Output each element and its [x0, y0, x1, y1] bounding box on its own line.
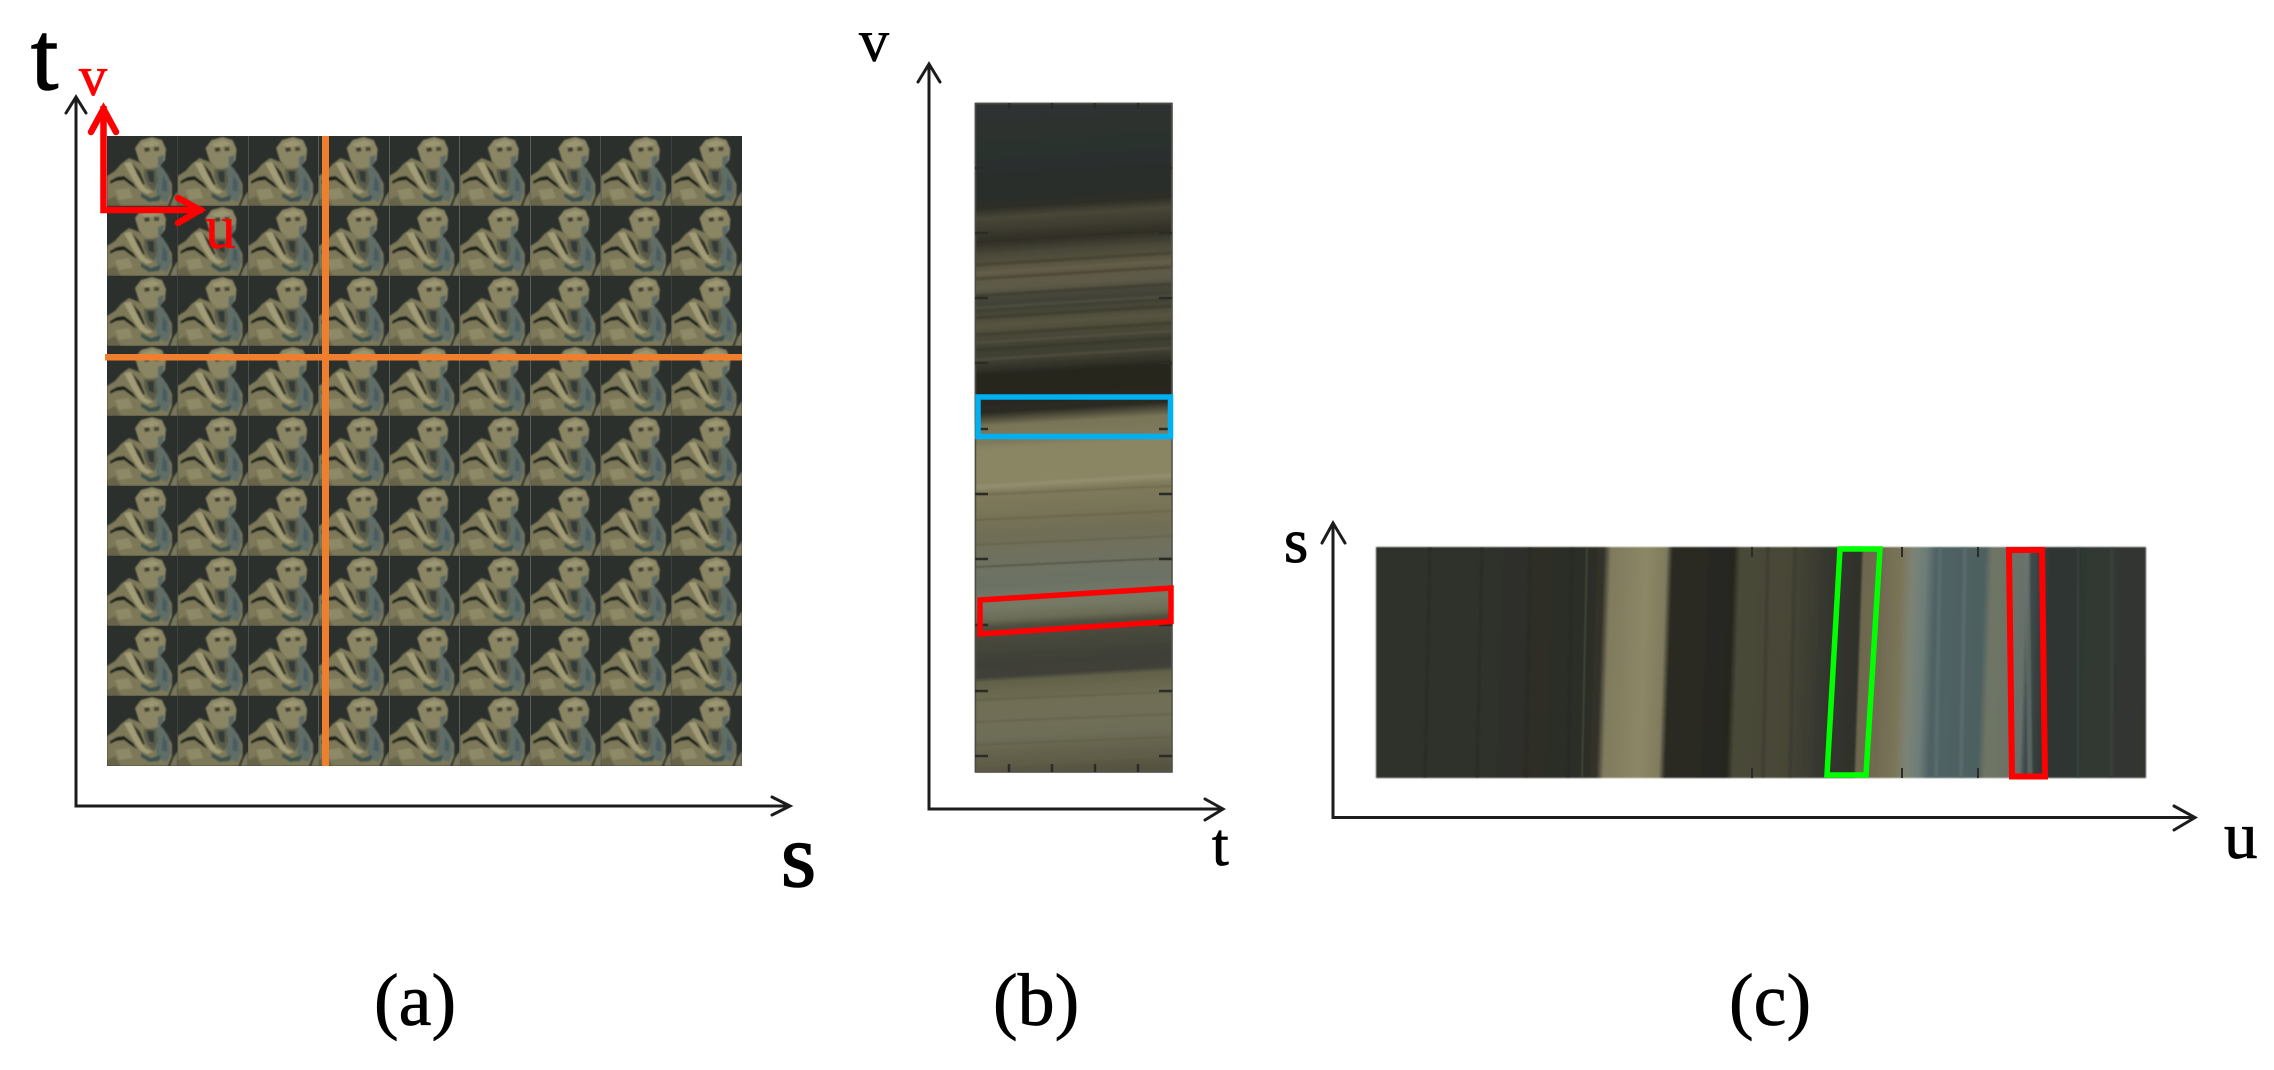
epipolar strip image: [1376, 547, 2146, 778]
label: red v: v: [79, 46, 107, 108]
label: s axis: s: [1284, 508, 1308, 576]
axes: t and v: [918, 64, 1223, 820]
caption: (a): (a): [374, 960, 456, 1042]
label: v axis: v: [859, 8, 889, 74]
red slanted highlight box: [980, 588, 1171, 634]
axes: u and s: [1322, 523, 2195, 830]
panel: (a) light field sub-aperture grid: [31, 3, 816, 906]
cyan highlight box: [978, 397, 1170, 436]
axes: s and t: [66, 97, 790, 815]
red arrows: u and v directions: [91, 106, 203, 223]
panel: (b) epipolar image v-t: [859, 8, 1229, 878]
label: t axis: t: [31, 3, 58, 111]
panel: (c) epipolar image s-u: [1284, 508, 2258, 873]
green slanted highlight box: [1827, 549, 1880, 775]
red highlight box: [2009, 550, 2045, 776]
label: t axis: t: [1212, 812, 1229, 878]
image grid: 9 by 9 views of figure: [107, 136, 742, 766]
epipolar strip image: [975, 103, 1172, 772]
label: u axis: u: [2224, 799, 2258, 873]
orange cross lines: [105, 136, 742, 766]
caption: (b): (b): [993, 960, 1079, 1042]
label: s axis: s: [781, 807, 816, 906]
label: red u: u: [205, 194, 236, 262]
caption: (c): (c): [1729, 960, 1811, 1042]
